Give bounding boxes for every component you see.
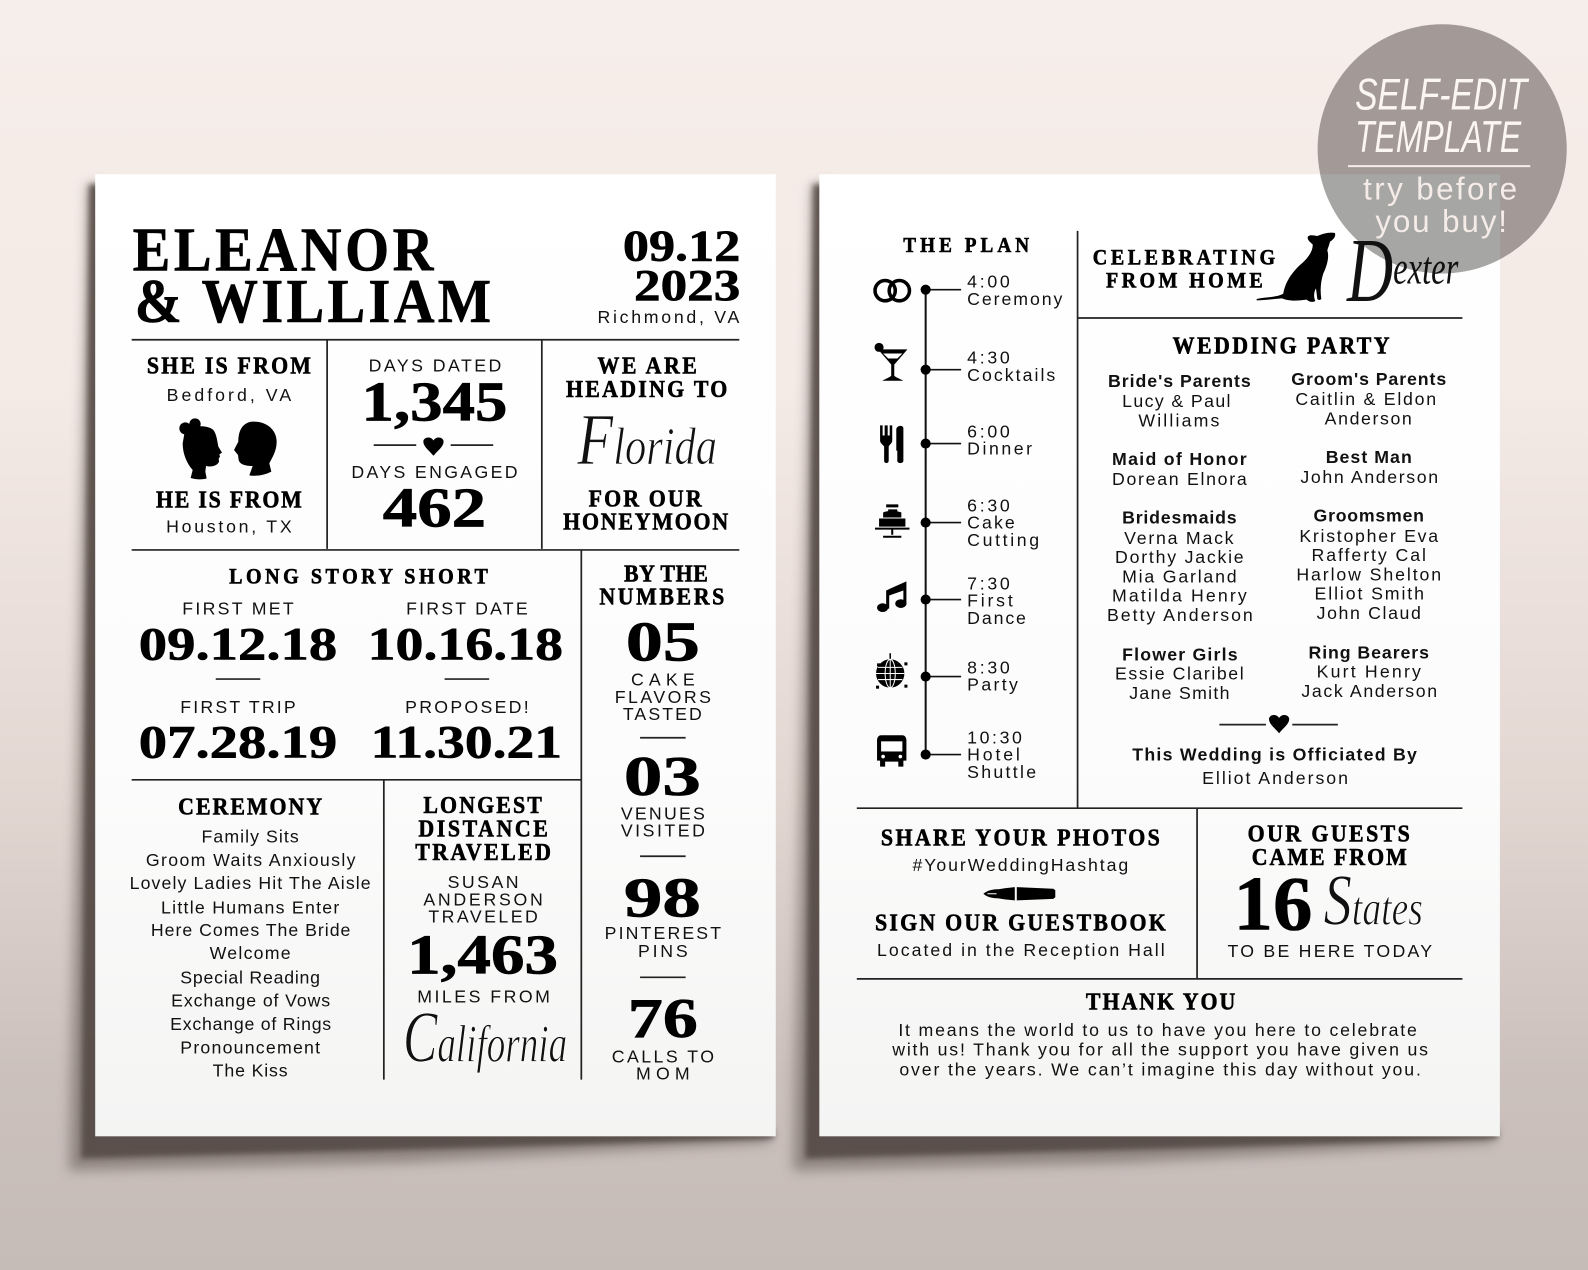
panel: by the numbers: BY THE [624,560,708,588]
schedule labels: 6:30 [967,495,1010,515]
icon: rings [875,281,909,301]
panel: ceremony [130,793,371,1081]
panel: honeymoon: Florida [576,399,717,480]
panel: wedding party: Caitlin & Eldon [1295,389,1436,409]
panel: wedding party: Williams [1138,410,1219,430]
icon: wedding cake [875,504,909,538]
title: couple names: & WILLIAM [135,266,491,336]
panel: ceremony: Lovely Ladies Hit The Aisle [130,873,371,893]
schedule labels [967,272,1063,782]
panel: thank you [891,989,1428,1080]
icon: fountain pen [983,887,1055,900]
panel: by the numbers: 76 [628,988,698,1050]
panel: days counters: DAYS ENGAGED [351,462,518,482]
panel: ceremony: Family Sits [202,827,299,847]
panel: wedding party: Matilda Henry [1112,586,1247,606]
panel: long story short: FIRST TRIP [180,697,296,717]
panel: by the numbers: CALLS TO [612,1046,714,1066]
wedding date and place [598,220,740,327]
icon: dog silhouette [1257,233,1335,302]
panel: wedding party: Mia Garland [1122,566,1237,586]
badge: self-edit circle: TEMPLATE [1355,113,1522,162]
panel: wedding party: Essie Claribel [1115,664,1244,684]
panel: thank you: THANK YOU [1086,989,1236,1016]
panel: wedding party: Jack Anderson [1301,681,1437,701]
panel: longest distance [403,792,567,1077]
panel: longest distance: DISTANCE [418,816,548,843]
icon: heart divider [374,438,493,456]
panel: long story short: LONG STORY SHORT [229,563,488,589]
panel: longest distance: California [403,996,567,1077]
panel: by the numbers: MOM [636,1064,690,1084]
badge: self-edit circle: SELF-EDIT [1355,70,1529,119]
badge: self-edit circle: try before [1363,172,1517,207]
panel: ceremony: Here Comes The Bride [151,920,351,940]
title: couple names [133,215,491,336]
panel: wedding party: Best Man [1326,447,1412,467]
panel: wedding party: Anderson [1325,408,1412,428]
badge: self-edit circle [1318,24,1567,273]
panel: celebrating from home: exter [1393,243,1459,295]
panel: wedding party: Elliot Anderson [1202,768,1348,788]
panel: longest distance: LONGEST [423,792,542,820]
icon: fork and knife [880,425,903,463]
panel: by the numbers [599,560,724,1084]
schedule labels: Cake [967,513,1015,533]
panel: long story short: 10.16.18 [368,618,563,670]
panel: wedding party: Harlow Shelton [1296,564,1441,584]
panel: long story short: 09.12.18 [139,618,337,670]
schedule labels: 6:00 [967,422,1010,442]
wedding date and place: Richmond, VA [598,307,739,327]
panel: hometowns: Houston, TX [166,517,292,537]
panel: wedding party: Verna Mack [1124,528,1234,548]
panel: honeymoon [563,353,728,536]
panel: ceremony: Little Humans Enter [161,898,339,918]
panel: ceremony: Special Reading [180,967,320,987]
icon: disco ball [876,653,907,689]
panel: wedding party: John Claud [1317,603,1421,623]
panel: by the numbers: 05 [626,611,700,673]
panel: ceremony: Pronouncement [180,1037,320,1057]
panel: honeymoon: HONEYMOON [563,509,728,536]
icon: shuttle bus [877,735,906,767]
panel: honeymoon: WE ARE [597,353,697,380]
panel: by the numbers: PINTEREST [605,923,721,943]
panel: by the numbers: CAKE [631,670,695,690]
panel: thank you: over the years. We can’t imagine this day without you. [899,1060,1421,1080]
panel: wedding party: John Anderson [1300,467,1438,487]
badge: self-edit circle: you buy! [1375,204,1507,239]
schedule labels: 8:30 [967,657,1010,677]
schedule labels: Ceremony [967,289,1063,309]
panel: wedding party: Bridesmaids [1122,508,1237,528]
panel: celebrating from home: FROM HOME [1106,268,1263,293]
panel: hometowns: HE IS FROM [156,486,302,514]
panel: long story short: PROPOSED! [405,697,529,717]
panel: longest distance: TRAVELED [428,907,538,927]
icon: music notes [877,581,906,612]
panel: wedding party: Jane Smith [1129,683,1229,703]
panel: hometowns: SHE IS FROM [147,353,311,380]
panel: celebrating from home: CELEBRATING [1093,244,1275,270]
schedule labels: Shuttle [967,762,1036,782]
panel: celebrating from home [1093,220,1459,321]
panel: left card [95,174,776,1136]
panel: by the numbers: NUMBERS [599,584,724,611]
panel: long story short: 11.30.21 [371,717,562,769]
panel: wedding party: Rafferty Cal [1312,545,1426,565]
panel: ceremony: CEREMONY [178,793,322,821]
panel: share and sign: #YourWeddingHashtag [912,855,1128,875]
panel: wedding party: Groomsmen [1314,506,1424,526]
schedule labels: Cocktails [967,365,1055,385]
wedding date and place: 2023 [634,260,740,310]
panel: wedding party: This Wedding is Officiated By [1132,745,1417,765]
panel: hometowns: Bedford, VA [167,385,291,405]
panel: longest distance: MILES FROM [417,987,550,1007]
title: couple names: ELEANOR [133,215,434,284]
panel: right card [819,24,1567,1136]
panel: thank you: with us! Thank you for all the support you have given us [891,1039,1428,1059]
panel: ceremony: The Kiss [213,1061,288,1081]
panel: wedding party: Ring Bearers [1308,642,1429,662]
panel: the plan timeline [875,234,1063,782]
panel: wedding party: Flower Girls [1122,644,1238,664]
panel: wedding party: Maid of Honor [1112,449,1247,469]
schedule labels: 7:30 [967,573,1010,593]
panel: guests came from: TO BE HERE TODAY [1227,941,1432,961]
panel: wedding party: WEDDING PARTY [1173,332,1390,360]
timeline spine [921,285,961,760]
panel: days counters: 1,345 [362,371,507,433]
panel: ceremony: Welcome [210,943,291,963]
wedding date and place: 09.12 [623,220,740,270]
panel: longest distance: ANDERSON [423,889,543,909]
panel: wedding party [1107,332,1446,788]
panel: longest distance: SUSAN [448,872,519,892]
panel: days counters [351,356,518,540]
panel: the plan timeline: THE PLAN [903,234,1029,257]
panel: share and sign: Located in the Reception Hall [877,940,1165,960]
panel: guests came from: States [1324,860,1423,941]
panel: honeymoon: HEADING TO [566,376,727,403]
panel: guests came from: OUR GUESTS [1248,821,1410,848]
icon: heart divider [1219,715,1338,733]
panel: by the numbers: FLAVORS [615,687,711,707]
panel: ceremony: Exchange of Vows [171,991,330,1011]
panel: celebrating from home: D [1346,220,1393,321]
icon: couple silhouettes [179,418,277,479]
panel: wedding party: Lucy & Paul [1122,391,1230,411]
card shadows [69,184,1498,1171]
panel: days counters: 462 [383,478,486,540]
panel: ceremony: Exchange of Rings [170,1014,331,1034]
icon: martini [875,343,907,381]
schedule labels: 4:00 [967,272,1010,292]
panel: by the numbers: 03 [624,746,701,808]
panel: by the numbers: TASTED [623,704,702,724]
schedule labels: First [967,591,1013,611]
panel: wedding party: Dorean Elnora [1112,469,1247,489]
panel: share and sign: SHARE YOUR PHOTOS [881,825,1160,852]
panel: wedding party: Elliot Smith [1315,584,1424,604]
schedule labels: Party [967,675,1018,695]
panel: guests came from [1227,821,1432,961]
schedule labels: Dinner [967,439,1032,459]
panel: wedding party: Kurt Henry [1317,662,1421,682]
panel: long story short: FIRST DATE [406,599,528,619]
panel: by the numbers: 98 [624,868,701,930]
panel: long story short [139,563,563,769]
panel: guests came from: CAME FROM [1252,844,1407,871]
panel: share and sign: SIGN OUR GUESTBOOK [875,910,1166,937]
panel: by the numbers: VENUES [621,803,705,823]
panel: long story short: FIRST MET [182,599,294,619]
panel: wedding party: Bride's Parents [1108,371,1251,391]
panel: days counters: DAYS DATED [369,356,501,376]
schedule labels: Hotel [967,745,1020,765]
panel: hometowns [147,353,311,537]
panel: share and sign [875,825,1166,960]
panel: wedding party: Dorthy Jackie [1115,547,1244,567]
panel: thank you: It means the world to us to have you here to celebrate [898,1020,1417,1040]
panel: by the numbers: PINS [638,941,688,961]
panel: honeymoon: FOR OUR [589,485,702,513]
schedule labels: Dance [967,608,1026,628]
panel: longest distance: TRAVELED [415,839,551,866]
panel: wedding party: Betty Anderson [1107,605,1253,625]
schedule labels: 10:30 [967,727,1022,747]
schedule labels: 4:30 [967,348,1010,368]
panel: long story short: 07.28.19 [139,717,337,769]
panel: by the numbers: VISITED [621,821,705,841]
panel: guests came from: 16 [1234,861,1313,947]
schedule labels: Cutting [967,530,1039,550]
panel: longest distance: 1,463 [407,924,558,986]
panel: ceremony: Groom Waits Anxiously [146,850,356,870]
panel: wedding party: Groom's Parents [1291,369,1446,389]
panel: wedding party: Kristopher Eva [1299,526,1438,546]
